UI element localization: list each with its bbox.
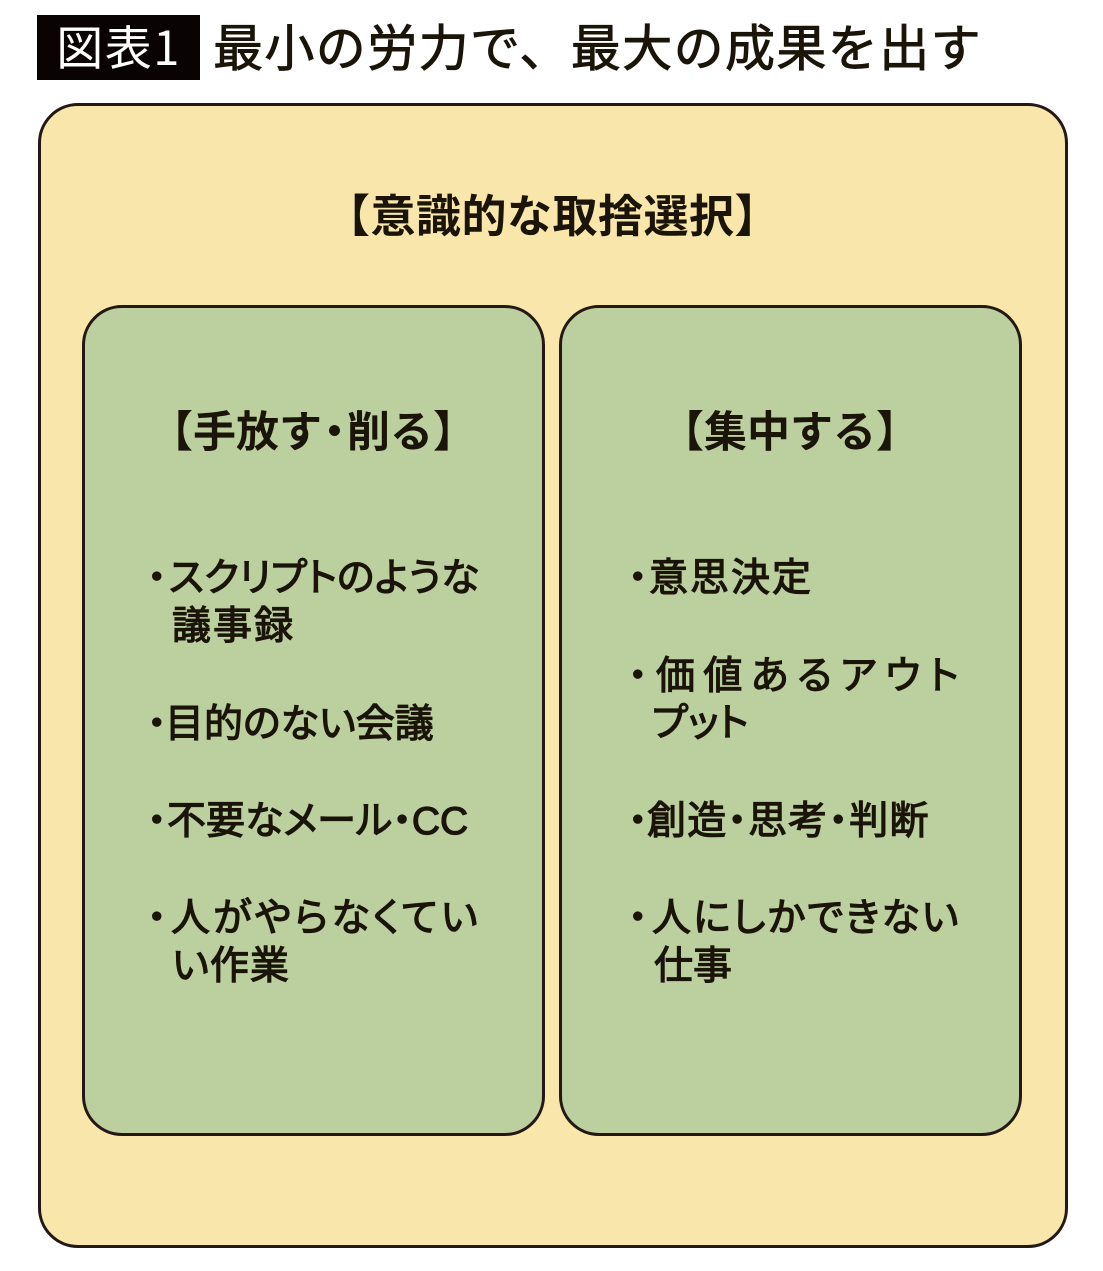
bullet: ・ (147, 897, 167, 940)
bullet: ・ (147, 800, 167, 843)
panel: focus (559, 305, 1022, 1136)
heading: focus: 【集中する】 (661, 409, 919, 457)
list: items to focus on (628, 557, 967, 988)
bullet: ・ (628, 897, 648, 940)
item: 不要なメール・CC (167, 800, 468, 843)
list: items to cut (147, 557, 481, 988)
bullet: ・ (628, 655, 648, 698)
heading: let go and cut: 【手放す・削る】 (150, 409, 476, 457)
bullet: ・ (628, 557, 648, 600)
item: 人がやらなくてい (171, 897, 481, 940)
bullet: ・ (628, 800, 648, 843)
item continuation: い作業 (172, 945, 290, 988)
panel: let go and cut (82, 305, 545, 1136)
item continuation: 仕事 (654, 945, 732, 988)
bullet: ・ (147, 703, 167, 746)
panel heading: 【意識的な取捨選択】 (325, 191, 780, 242)
item continuation: 議事録 (172, 605, 295, 648)
item: スクリプトのような (169, 557, 479, 600)
item: 意思決定 (649, 557, 813, 600)
item: 価値あるアウト (656, 655, 967, 698)
title (37, 15, 982, 80)
item continuation: プット (652, 702, 749, 745)
item: 創造・思考・判断 (647, 800, 930, 843)
item: 目的のない会議 (165, 703, 434, 746)
item: 人にしかできない (652, 897, 961, 940)
bullet: ・ (147, 557, 167, 600)
title text: 最小の労力で、最大の成果を出す (213, 21, 982, 77)
